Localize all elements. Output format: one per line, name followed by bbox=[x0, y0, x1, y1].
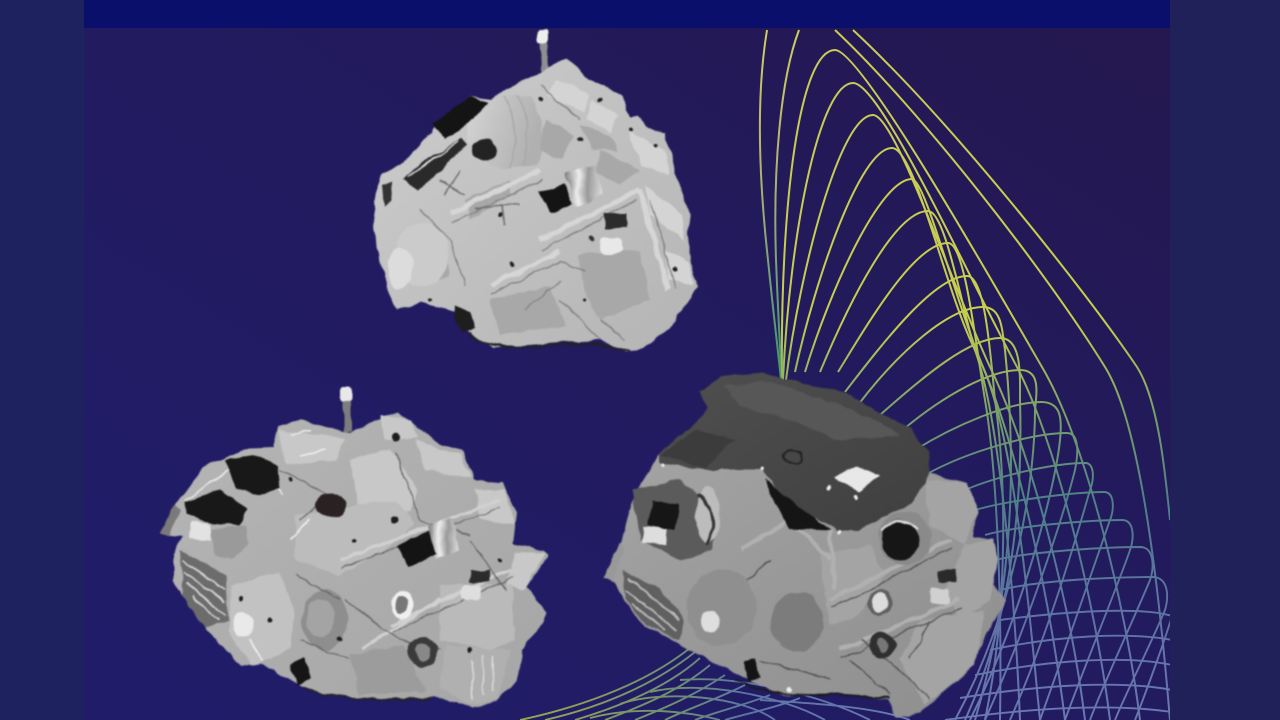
engine: bottom right hybrid transmission bbox=[604, 373, 1006, 718]
housing silhouette bbox=[373, 57, 698, 353]
sensor cap bbox=[316, 493, 346, 517]
cylinder bands bbox=[505, 95, 527, 167]
centre casting bbox=[295, 500, 415, 575]
black control cover bbox=[659, 373, 930, 530]
side port bbox=[589, 214, 626, 254]
black control module bbox=[185, 456, 280, 525]
cover port ring bbox=[784, 450, 802, 464]
engine: bottom left transmission bbox=[160, 387, 548, 708]
pale hub disc bbox=[233, 612, 253, 638]
housing silhouette bbox=[604, 453, 1006, 718]
right castings bbox=[820, 480, 998, 705]
engine: top centre transmission bbox=[373, 29, 698, 353]
output cylinder bbox=[538, 165, 603, 212]
wave: outer descending strands bbox=[835, 30, 1170, 720]
finned cooler bbox=[180, 550, 228, 628]
bottom pan line bbox=[305, 688, 430, 700]
white plate bbox=[833, 465, 880, 492]
centre light braces bbox=[740, 520, 960, 650]
bright detail flecks bbox=[185, 430, 325, 660]
white tab bbox=[189, 522, 211, 541]
dark block bbox=[290, 658, 310, 686]
upper dome and ribs bbox=[278, 415, 545, 590]
left end cavity bbox=[382, 180, 393, 207]
bottom shaded casting bbox=[350, 645, 425, 695]
dark bolts and small parts bbox=[428, 98, 677, 333]
lower left hub casing bbox=[228, 572, 295, 665]
dark block bbox=[743, 657, 760, 682]
wireframe wave surface bbox=[520, 30, 1172, 720]
light braces bbox=[340, 500, 510, 648]
left margin band bbox=[0, 0, 84, 720]
dark sensor cap bbox=[473, 139, 497, 161]
top ribs bbox=[548, 78, 694, 285]
wave: lower-left mesh bbox=[520, 648, 910, 720]
wave: left rising strands bbox=[760, 30, 799, 380]
small fasteners bbox=[238, 433, 502, 652]
right margin band bbox=[1170, 0, 1280, 720]
bottom pan line bbox=[735, 680, 890, 698]
right casting bbox=[440, 585, 515, 650]
hub ring bbox=[302, 590, 348, 650]
casting shadow lines bbox=[420, 85, 676, 340]
light long braces bbox=[450, 170, 668, 290]
hub casing bbox=[687, 570, 823, 652]
output cylinder bbox=[878, 511, 932, 565]
ring port bbox=[868, 589, 892, 615]
small fasteners bbox=[660, 463, 858, 690]
black bracket bbox=[433, 97, 488, 140]
casting shadow lines bbox=[735, 548, 962, 700]
silver module body bbox=[208, 525, 248, 560]
cover end block bbox=[660, 430, 735, 468]
shaded recesses bbox=[420, 120, 650, 335]
grey harness tube bbox=[160, 505, 181, 536]
shadow under cover bbox=[765, 478, 830, 530]
left electronics bbox=[632, 480, 720, 560]
top header bar bbox=[84, 0, 1170, 28]
raised cover ledge bbox=[722, 382, 900, 440]
wiring lattice bbox=[440, 170, 520, 225]
ring port bbox=[391, 591, 413, 619]
shift rod bbox=[341, 387, 352, 432]
casting shadow lines bbox=[280, 452, 512, 660]
shift rod bbox=[537, 29, 549, 80]
finned cooler bbox=[604, 543, 685, 640]
housing silhouette bbox=[160, 412, 548, 708]
right ribbed corner bbox=[440, 645, 510, 705]
side valve bbox=[462, 570, 490, 600]
left hub bbox=[387, 223, 448, 288]
side valve bbox=[930, 570, 956, 604]
main cylinder bbox=[467, 95, 542, 168]
bottom pan line bbox=[470, 332, 630, 352]
dark harness bbox=[403, 138, 468, 190]
axle bearing bbox=[869, 632, 897, 658]
wave: peak arcs upper family bbox=[782, 50, 1140, 720]
output cylinder bbox=[397, 518, 460, 566]
wave: mesh rings lower family bbox=[925, 433, 1172, 720]
axle bearing bbox=[408, 637, 438, 667]
